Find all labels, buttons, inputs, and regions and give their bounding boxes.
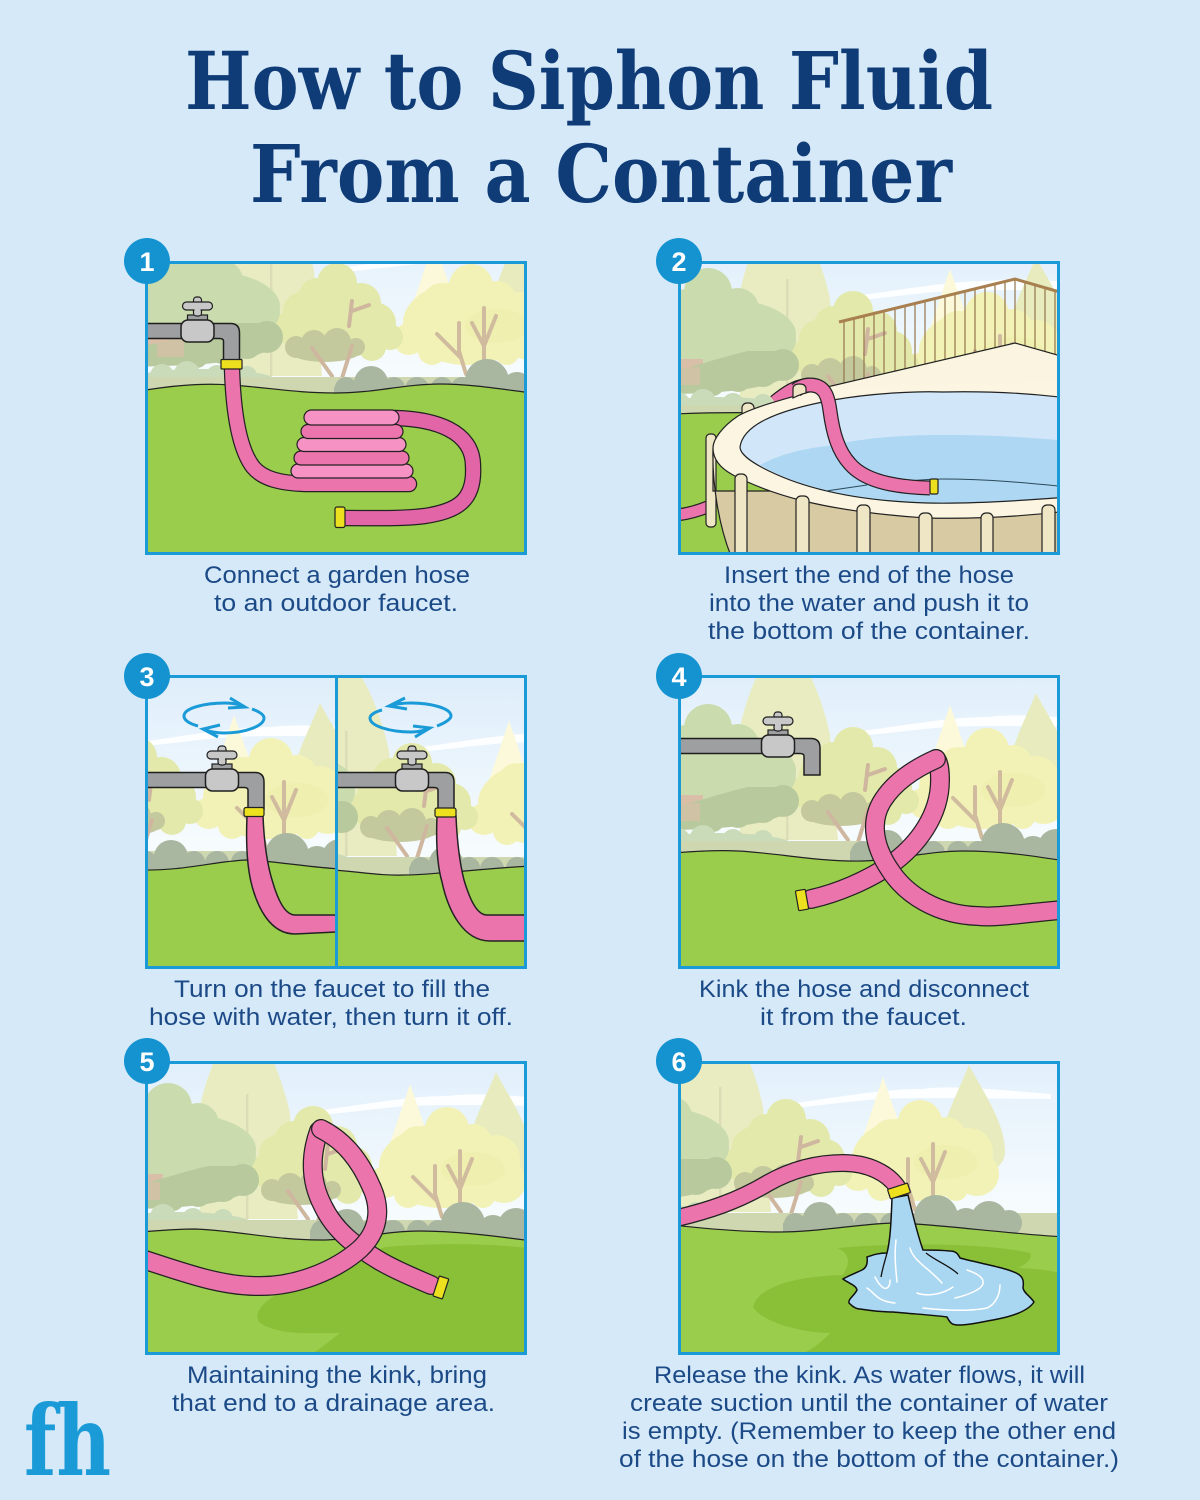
badge 3: 3 — [139, 662, 155, 692]
coupler — [433, 1276, 449, 1299]
caption 5: that end to a drainage area. — [172, 1390, 495, 1417]
rotation arrows left — [184, 698, 264, 737]
background scenery — [681, 678, 1057, 860]
caption 6: of the hose on the bottom of the container.) — [619, 1446, 1119, 1473]
lawn — [681, 850, 1057, 966]
lawn — [140, 1229, 532, 1361]
caption 2: Insert the end of the hose — [724, 562, 1014, 589]
pool water — [740, 392, 1068, 503]
title: From a Container — [250, 127, 953, 221]
panel 5: bring to drainage — [78, 994, 638, 1361]
back post — [706, 434, 716, 527]
badge 2: 2 — [671, 247, 687, 277]
background scenery right — [338, 678, 524, 874]
lawn right — [338, 866, 524, 966]
caption 2: into the water and push it to — [709, 590, 1029, 617]
panel 2: hose in pool — [678, 261, 1060, 555]
coupler — [887, 1183, 911, 1199]
drainage area — [753, 1244, 1060, 1355]
pool rim — [713, 381, 1068, 518]
caption 5: Maintaining the kink, bring — [187, 1362, 487, 1389]
caption 2: the bottom of the container. — [708, 618, 1030, 645]
faucet — [668, 712, 820, 775]
coupler right — [435, 808, 456, 817]
hose couplers — [221, 360, 345, 528]
frame — [146, 262, 526, 554]
badge 6: 6 — [671, 1047, 687, 1077]
background scenery left — [148, 678, 335, 870]
caption 1 — [204, 562, 470, 617]
badge 4: 4 — [671, 662, 687, 692]
caption 3: Turn on the faucet to fill the — [174, 976, 490, 1003]
frame — [680, 1062, 1058, 1354]
badge 1: 1 — [139, 247, 155, 277]
stream inner lines — [881, 1253, 958, 1277]
caption 4: it from the faucet. — [760, 1004, 967, 1031]
caption 3: hose with water, then turn it off. — [149, 1004, 513, 1031]
logo: fh — [24, 1384, 111, 1498]
lawn — [673, 1223, 1065, 1361]
badge 4 — [656, 653, 702, 699]
badge 1 — [124, 238, 170, 284]
hose left — [247, 816, 337, 934]
coupler left — [244, 808, 264, 816]
title: How to Siphon Fluid — [185, 34, 993, 128]
faucet right — [338, 745, 455, 808]
badge 5: 5 — [139, 1047, 155, 1077]
right sub-panel — [338, 678, 524, 966]
drainage area — [257, 1244, 527, 1355]
hose coupler — [930, 479, 938, 494]
water puddle and stream — [843, 1195, 1034, 1325]
panel 6: release the kink — [551, 987, 1111, 1361]
hose right — [437, 816, 529, 941]
caption 6: is empty. (Remember to keep the other end — [622, 1418, 1116, 1445]
frame — [146, 1062, 526, 1354]
background scenery — [681, 264, 1057, 414]
hose into water — [796, 385, 930, 488]
lawn — [140, 384, 532, 561]
lawn — [681, 412, 767, 552]
caption 4: Kink the hose and disconnect — [699, 976, 1029, 1003]
hose — [673, 1163, 898, 1219]
faucet — [148, 296, 240, 359]
hose behind rim — [775, 385, 810, 402]
pool posts — [734, 473, 1056, 552]
caption 1: Connect a garden hose — [204, 562, 470, 589]
caption 1: to an outdoor faucet. — [214, 590, 458, 617]
background scenery — [148, 264, 524, 392]
coupler — [795, 889, 809, 911]
kinked hose — [130, 1129, 431, 1286]
badge 3 — [124, 653, 170, 699]
caption 3 — [149, 976, 513, 1031]
badge 2 — [656, 238, 702, 284]
hose outside pool — [676, 506, 710, 515]
background scenery — [551, 987, 1111, 1347]
title — [185, 34, 993, 221]
lawn left — [148, 859, 335, 966]
deck — [830, 344, 1057, 387]
caption 4 — [699, 976, 1029, 1031]
frame — [680, 262, 1058, 554]
caption 6: Release the kink. As water flows, it will — [654, 1362, 1085, 1389]
fence — [839, 279, 1063, 383]
faucet left — [148, 745, 265, 810]
panel 4: kink the hose — [678, 675, 1060, 969]
panel 1: connect hose to faucet — [145, 261, 527, 555]
badge 6 — [656, 1038, 702, 1084]
water ripples — [867, 1240, 1000, 1310]
left sub-panel — [148, 678, 335, 966]
garden hose coil — [232, 369, 473, 518]
background scenery — [78, 994, 638, 1354]
back rim post — [741, 402, 755, 414]
kinked hose — [811, 759, 1073, 916]
caption 5 — [172, 1362, 495, 1417]
rotation arrows right — [370, 698, 451, 737]
panel 3: turn on faucet — [145, 675, 527, 969]
pool wall — [712, 448, 1057, 552]
rim post over hose — [793, 384, 806, 398]
frame — [680, 676, 1058, 968]
frame — [146, 676, 526, 968]
caption 6: create suction until the container of water — [630, 1390, 1108, 1417]
caption 6 — [619, 1362, 1119, 1473]
caption 2 — [708, 562, 1030, 645]
badge 5 — [124, 1038, 170, 1084]
